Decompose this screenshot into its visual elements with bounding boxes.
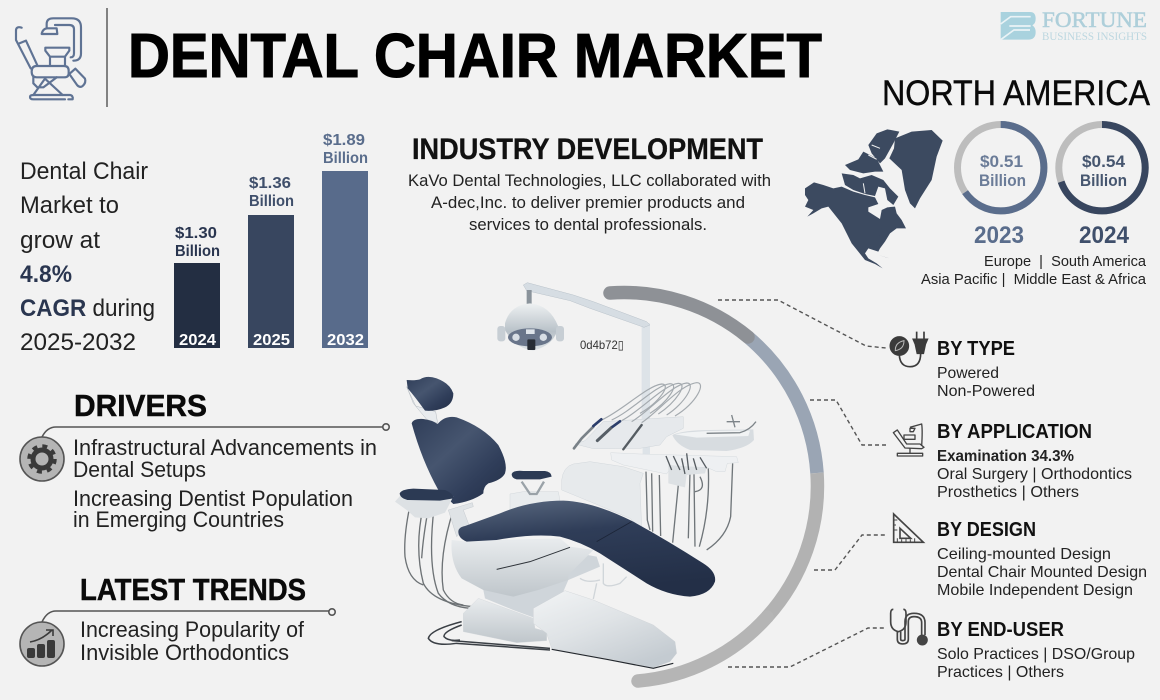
cable loops [602, 383, 701, 423]
instrument holders [668, 465, 707, 487]
segment: by application [937, 421, 1132, 501]
segment: by design: Dental Chair Mounted Design [937, 564, 1147, 581]
CAGR text block: Market to [20, 192, 119, 219]
segment: by end-user [937, 619, 1135, 681]
heading: industry development: INDUSTRY DEVELOPMENT [412, 133, 763, 166]
segment: by type: BY TYPE [937, 338, 1015, 360]
donut: 2024: Billion [1080, 171, 1127, 190]
seat cushion [458, 501, 715, 597]
icon: gear [20, 437, 64, 481]
donut: 2024: 2024 [1079, 222, 1130, 249]
donut: 2023 [958, 124, 1044, 249]
bar: 2032: $1.89 [323, 132, 365, 149]
donut: 2023: 2023 [974, 222, 1024, 249]
industry development text: A-dec,Inc. to deliver premier products and [431, 194, 745, 212]
segment: by design: Ceiling-mounted Design [937, 546, 1111, 563]
drivers text: Infrastructural Advancements in [73, 435, 377, 460]
basin [672, 429, 754, 451]
dental unit and instruments [562, 370, 756, 550]
header divider [106, 8, 108, 107]
segment: by type [937, 338, 1035, 400]
text artifact: 0d4b72▯ [580, 338, 624, 352]
bar: 2025 [248, 175, 294, 349]
left armrest holder [395, 496, 453, 518]
industry development text [408, 172, 771, 234]
left armrest cushion [400, 489, 453, 501]
arc around dental chair [610, 292, 817, 681]
headrest support [407, 387, 438, 423]
trends text: Invisible Orthodontics [80, 640, 289, 665]
icon: dental chair outline [16, 18, 85, 99]
backrest [412, 417, 506, 504]
bar: 2032: Billion [323, 150, 368, 167]
logo: Fortune Business Insights: BUSINESS INSIGHTS [1042, 29, 1147, 43]
support arm [611, 453, 738, 474]
segment: by application: Examination 34.3% [937, 448, 1074, 465]
drivers text: Dental Setups [73, 457, 206, 482]
industry development text: KaVo Dental Technologies, LLC collaborated with [408, 172, 771, 190]
industry development text: services to dental professionals. [469, 216, 707, 234]
connector: by type [718, 300, 886, 348]
segment: by type: Powered [937, 365, 999, 382]
segment: by end-user: Practices | Others [937, 664, 1064, 681]
segment: by application: Oral Surgery | Orthodontics [937, 466, 1132, 483]
right armrest cushion [512, 471, 552, 479]
cushion seam [597, 522, 632, 542]
drivers text [73, 435, 377, 532]
connector: by application [810, 400, 886, 445]
cable coil [428, 622, 550, 650]
donut: 2024 [1059, 124, 1145, 249]
seat shell seam [497, 547, 570, 569]
bar: 2032 [322, 132, 368, 349]
CAGR text block: grow at [20, 227, 100, 254]
chair back assembly [395, 377, 560, 537]
right armrest support [522, 482, 544, 494]
CAGR text block [20, 158, 155, 356]
bar: 2025: $1.36 [249, 175, 291, 192]
segment: by design [937, 519, 1147, 599]
rear base [463, 598, 547, 643]
front base [533, 591, 677, 668]
operating lamp and arm [497, 283, 650, 423]
trends text: Increasing Popularity of [80, 617, 305, 642]
bar: 2024: 2024 [179, 332, 216, 349]
CAGR text block: 2025-2032 [20, 329, 136, 356]
unit column [643, 370, 650, 457]
other regions: Europe | South America [984, 254, 1147, 270]
bar: 2024: Billion [175, 243, 220, 260]
right armrest box [510, 492, 560, 511]
logo: Fortune Business Insights: FORTUNE [1042, 7, 1147, 32]
bar: 2024 [174, 225, 220, 349]
base cables behind [580, 563, 627, 599]
left side tubing [405, 498, 473, 608]
donut: 2024: $0.54 [1082, 152, 1126, 171]
icon: by type plug [890, 332, 927, 367]
segment: by end-user: Solo Practices | DSO/Group [937, 646, 1135, 663]
hanging cables [646, 463, 733, 550]
trends text [80, 617, 305, 665]
segment: by end-user: BY END-USER [937, 619, 1065, 641]
icon: by end-user stethoscope [891, 609, 927, 645]
base shadow line [552, 649, 673, 668]
CAGR text block: CAGR during [20, 295, 155, 322]
logo: Fortune Business Insights [1001, 7, 1147, 43]
icon: by design set square [894, 514, 923, 542]
headrest [407, 377, 453, 411]
donut: 2023: $0.51 [980, 152, 1023, 171]
icon: growth chart [20, 622, 64, 666]
bar chart [174, 132, 368, 349]
drivers connector line [42, 424, 389, 437]
bar: 2025: 2025 [253, 332, 290, 349]
CAGR text block: Dental Chair [20, 158, 148, 185]
other regions: Asia Pacific | Middle East & Africa [921, 272, 1147, 288]
trends connector line [42, 609, 335, 622]
handpieces [574, 419, 642, 449]
chair arm support [448, 503, 473, 537]
donut: 2023: Billion [979, 171, 1026, 190]
connector: by design [814, 535, 885, 570]
CAGR text block: 4.8% [20, 261, 72, 288]
segment: by application: BY APPLICATION [937, 421, 1092, 443]
drivers text: Increasing Dentist Population [73, 486, 353, 511]
segment: by design: Mobile Independent Design [937, 582, 1133, 599]
other regions [921, 254, 1147, 288]
icon: by application chair [893, 424, 924, 456]
heading: latest trends: LATEST TRENDS [80, 572, 306, 607]
unit cabinet [562, 462, 643, 530]
segment: by design: BY DESIGN [937, 519, 1036, 541]
seat shell [451, 538, 593, 597]
pedestal [483, 550, 600, 617]
segment: by application: Prosthetics | Others [937, 484, 1079, 501]
chair seat and base [428, 501, 715, 668]
drivers text: in Emerging Countries [73, 507, 284, 532]
connector: by end-user [728, 628, 886, 667]
map: North America [805, 129, 943, 268]
bar: 2024: $1.30 [175, 225, 217, 242]
heading: drivers: DRIVERS [74, 388, 207, 423]
segment: by type: Non-Powered [937, 383, 1035, 400]
title: DENTAL CHAIR MARKET [128, 22, 822, 91]
instrument tray [575, 417, 683, 449]
bar: 2032: 2032 [327, 332, 364, 349]
bar: 2025: Billion [249, 193, 294, 210]
